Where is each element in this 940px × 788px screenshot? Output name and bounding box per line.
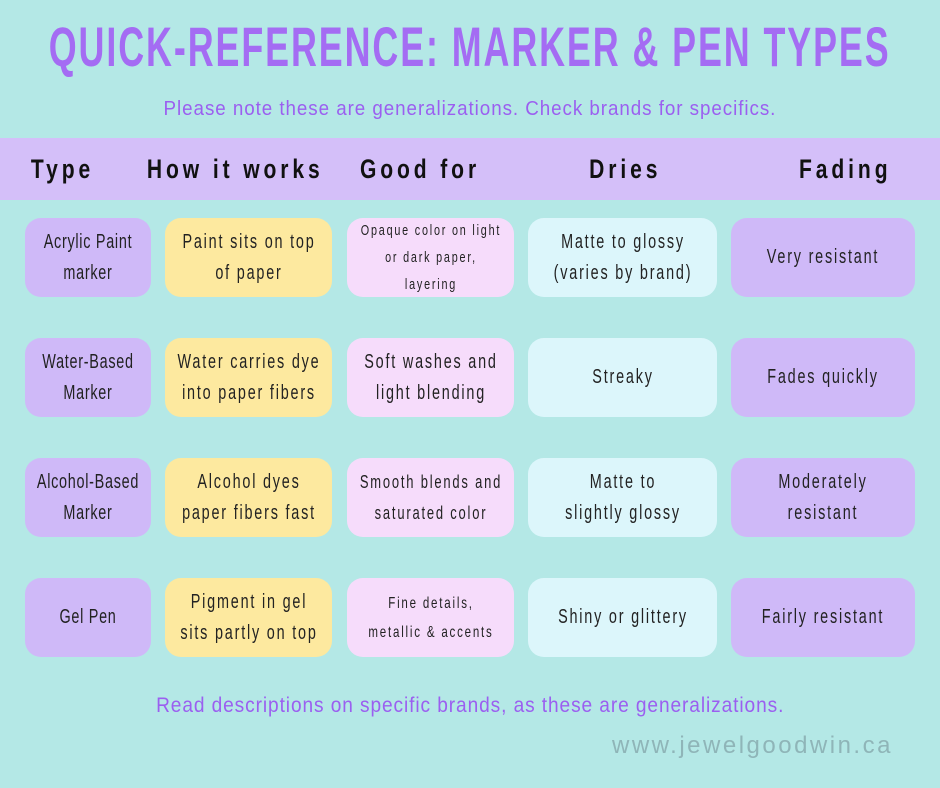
cell: fading <box>731 458 915 537</box>
cell: good: layering <box>404 276 457 293</box>
cell: type: Water-Based <box>42 350 134 372</box>
cell: type: Alcohol-Based <box>37 470 139 492</box>
cell: good <box>347 578 514 657</box>
cell: good: Smooth blends and <box>359 472 502 492</box>
cell: type: Marker <box>63 382 113 404</box>
cell: dries: Matte to glossy <box>561 230 684 252</box>
cell: good: saturated color <box>374 502 487 522</box>
cell: good: Soft washes and <box>364 350 497 372</box>
row 2: water <box>25 338 915 417</box>
cell: dries <box>528 578 717 657</box>
cell: type: Gel Pen <box>59 606 117 628</box>
cell: type: Marker <box>63 502 113 524</box>
row 3: alcohol <box>25 458 915 537</box>
cell: dries: Matte to <box>589 470 656 492</box>
row 1: acrylic <box>25 218 915 297</box>
cell: dries: Streaky <box>592 366 653 388</box>
cell: good: light blending <box>375 382 486 404</box>
cell: dries <box>528 218 717 297</box>
cell: fading: Fades quickly <box>767 366 879 388</box>
cell: how: into paper fibers <box>182 382 315 404</box>
cell: fading: Very resistant <box>767 246 879 268</box>
cell: fading: Fairly resistant <box>762 606 884 628</box>
cell: type <box>25 458 151 537</box>
website: www.jewelgoodwin.ca <box>612 732 893 759</box>
cell: fading <box>731 218 915 297</box>
header: Good for: Good for <box>360 154 480 184</box>
cell: dries: Shiny or glittery <box>558 606 687 628</box>
cell: dries: (varies by brand) <box>553 262 692 284</box>
cell: how: sits partly on top <box>180 622 317 644</box>
cell: good <box>347 458 514 537</box>
header: Dries: Dries <box>589 154 661 184</box>
cell: type <box>25 338 151 417</box>
cell: dries <box>528 458 717 537</box>
cell: fading: Moderately <box>778 470 868 492</box>
cell: how: Water carries dye <box>177 350 320 372</box>
cell: good: Fine details, <box>388 594 473 612</box>
header band <box>0 138 940 200</box>
cell: fading: resistant <box>788 502 858 524</box>
cell: fading <box>731 578 915 657</box>
cell: how: of paper <box>215 262 282 284</box>
cell: how: paper fibers fast <box>182 502 315 524</box>
cell: good: Opaque color on light <box>360 222 501 239</box>
cell: good: metallic & accents <box>368 624 493 640</box>
header: Fading: Fading <box>799 154 891 184</box>
cell: how: Alcohol dyes <box>197 470 300 492</box>
row 4: gel <box>25 578 915 657</box>
cell: how: Paint sits on top <box>182 230 315 252</box>
cell: type <box>25 578 151 657</box>
cell: type: marker <box>63 262 113 284</box>
cell: good <box>347 218 514 297</box>
cell: dries <box>528 338 717 417</box>
subtitle note: Please note these are generalizations. Check brands for specifics. <box>164 98 776 120</box>
title: QUICK-REFERENCE: MARKER & PEN TYPES <box>49 15 891 78</box>
cell: type: Acrylic Paint <box>44 230 132 252</box>
cell: fading <box>731 338 915 417</box>
footer note: Read descriptions on specific brands, as these are generalizations. <box>156 694 784 717</box>
cell: how <box>165 338 332 417</box>
cell: type <box>25 218 151 297</box>
header: How it works: How it works <box>147 154 323 184</box>
cell: good <box>347 338 514 417</box>
cell: how <box>165 458 332 537</box>
cell: good: or dark paper, <box>385 249 476 266</box>
header: Type: Type <box>31 154 94 184</box>
cell: how <box>165 218 332 297</box>
cell: how: Pigment in gel <box>190 590 307 612</box>
cell: dries: slightly glossy <box>565 502 680 524</box>
cell: how <box>165 578 332 657</box>
